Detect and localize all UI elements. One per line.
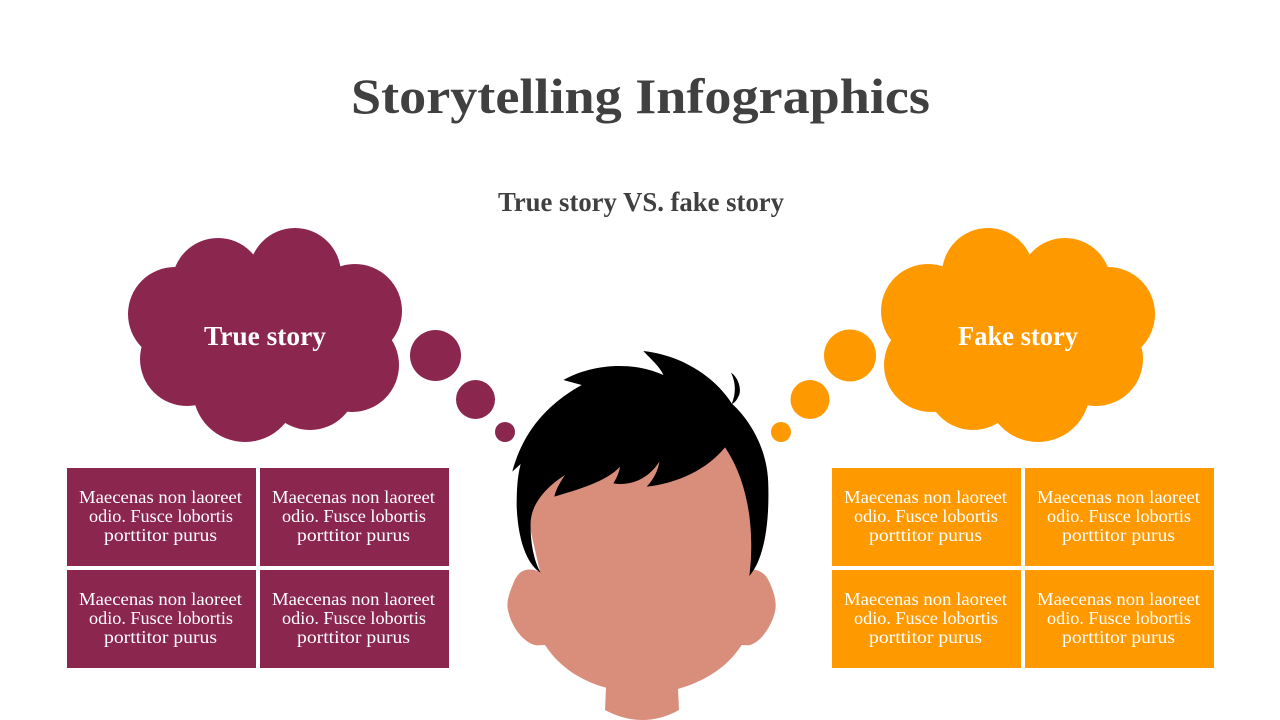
text box 3: porttitor purus — [869, 627, 982, 647]
text box 2: porttitor purus — [1062, 525, 1175, 545]
text box 4: porttitor purus — [1062, 627, 1175, 647]
text box 1: Maecenas non laoreet — [79, 487, 242, 507]
thought cloud: true story — [128, 228, 402, 442]
subtitle: True story VS. fake story — [498, 187, 784, 217]
icon: head with black hair — [507, 351, 776, 720]
text box 1: odio. Fusce lobortis — [854, 506, 998, 526]
text box 3: Maecenas non laoreet — [79, 589, 242, 609]
thought bubbles: fake story — [771, 330, 876, 442]
text box 2: Maecenas non laoreet — [272, 487, 435, 507]
text box 1: odio. Fusce lobortis — [89, 506, 233, 526]
text box 4: Maecenas non laoreet — [1037, 589, 1200, 609]
thought bubbles: true story — [410, 330, 515, 442]
title: Storytelling Infographics — [351, 68, 930, 124]
text box 2: Maecenas non laoreet — [1037, 487, 1200, 507]
text box 4: Maecenas non laoreet — [272, 589, 435, 609]
text box 3: Maecenas non laoreet — [844, 589, 1007, 609]
text box 4: odio. Fusce lobortis — [1047, 608, 1191, 628]
thought cloud: fake story — [881, 228, 1155, 442]
text box 2: porttitor purus — [297, 525, 410, 545]
text box 3: porttitor purus — [104, 627, 217, 647]
text box 3 — [67, 570, 256, 668]
label: fake story: Fake story — [958, 321, 1078, 351]
hair — [512, 351, 768, 576]
text box 4 — [1025, 570, 1214, 668]
panel: fake story text boxes — [832, 468, 1214, 668]
text box 2 — [1025, 468, 1214, 566]
label: true story: True story — [204, 321, 326, 351]
text box 1 — [832, 468, 1021, 566]
text box 1: porttitor purus — [104, 525, 217, 545]
text box 1: porttitor purus — [869, 525, 982, 545]
text box 1 — [67, 468, 256, 566]
text box 4: odio. Fusce lobortis — [282, 608, 426, 628]
text box 2: odio. Fusce lobortis — [282, 506, 426, 526]
panel: true story text boxes — [67, 468, 449, 668]
text box 2: odio. Fusce lobortis — [1047, 506, 1191, 526]
text box 3 — [832, 570, 1021, 668]
text box 3: odio. Fusce lobortis — [854, 608, 998, 628]
face — [507, 440, 776, 720]
text box 4: porttitor purus — [297, 627, 410, 647]
text box 1: Maecenas non laoreet — [844, 487, 1007, 507]
text box 3: odio. Fusce lobortis — [89, 608, 233, 628]
text box 2 — [260, 468, 449, 566]
hair curl — [731, 373, 740, 404]
text box 4 — [260, 570, 449, 668]
